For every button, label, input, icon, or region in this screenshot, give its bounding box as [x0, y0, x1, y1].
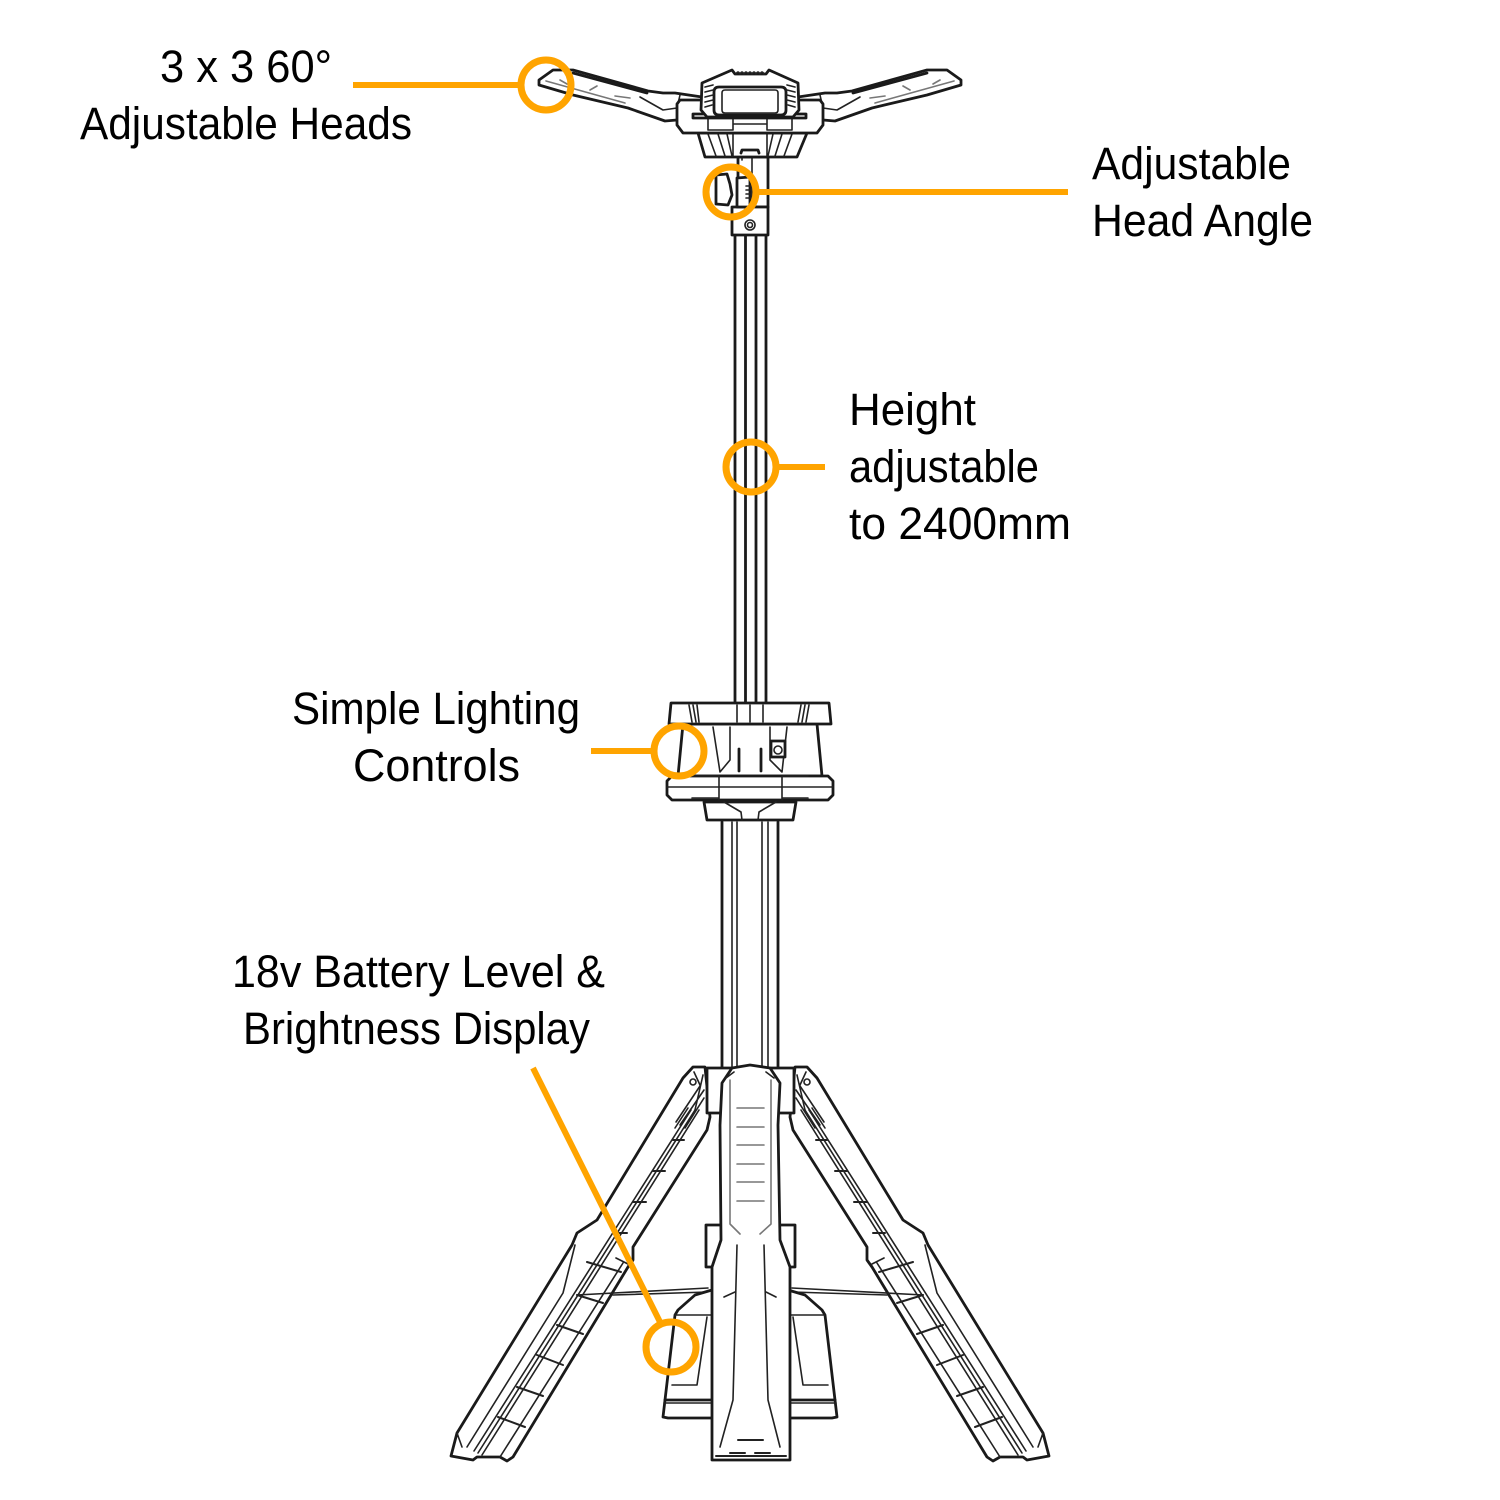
central head unit — [701, 70, 799, 117]
left light arm — [539, 70, 702, 121]
text: adjustable heads: Adjustable Heads — [80, 98, 412, 149]
text: battery and brightness display: 18v Battery Level & — [232, 946, 605, 997]
control top plate — [669, 703, 831, 724]
battery pack — [663, 1290, 837, 1418]
text: adjustable heads — [80, 41, 412, 149]
head angle knob — [716, 174, 732, 205]
text: battery and brightness display — [232, 946, 605, 1054]
text: height adjustable: adjustable — [849, 441, 1039, 492]
callout: height leader — [726, 442, 825, 492]
head base and fins — [677, 100, 823, 157]
text: simple lighting controls — [292, 683, 580, 791]
text: height adjustable: to 2400mm — [849, 498, 1071, 549]
text: simple lighting controls: Simple Lighting — [292, 683, 580, 734]
text: height adjustable — [849, 384, 1071, 549]
callout: battery display leader — [533, 1068, 696, 1372]
text: adjustable head angle — [1092, 138, 1313, 246]
callout: lighting controls leader — [591, 726, 704, 776]
central handle — [712, 1065, 790, 1460]
text: adjustable heads: 3 x 3 60° — [160, 41, 332, 92]
text: height adjustable: Height — [849, 384, 976, 435]
side brackets — [706, 1068, 795, 1267]
right tripod leg — [790, 1067, 1049, 1461]
callout: head angle leader — [706, 167, 1068, 217]
head mount neck — [716, 157, 768, 235]
right light arm — [798, 70, 961, 121]
control lower ring — [667, 776, 833, 800]
left tripod leg — [451, 1067, 710, 1461]
text: adjustable head angle: Head Angle — [1092, 195, 1313, 246]
callout: adjustable heads leader — [353, 60, 571, 110]
text: battery and brightness display: Brightness Display — [243, 1003, 590, 1054]
work light illustration — [451, 70, 1049, 1461]
lower telescopic pole — [722, 822, 778, 1068]
text: adjustable head angle: Adjustable — [1092, 138, 1291, 189]
lighting control housing — [667, 703, 833, 820]
upper telescopic pole — [735, 235, 766, 703]
control collar — [704, 802, 796, 820]
text: simple lighting controls: Controls — [353, 740, 520, 791]
